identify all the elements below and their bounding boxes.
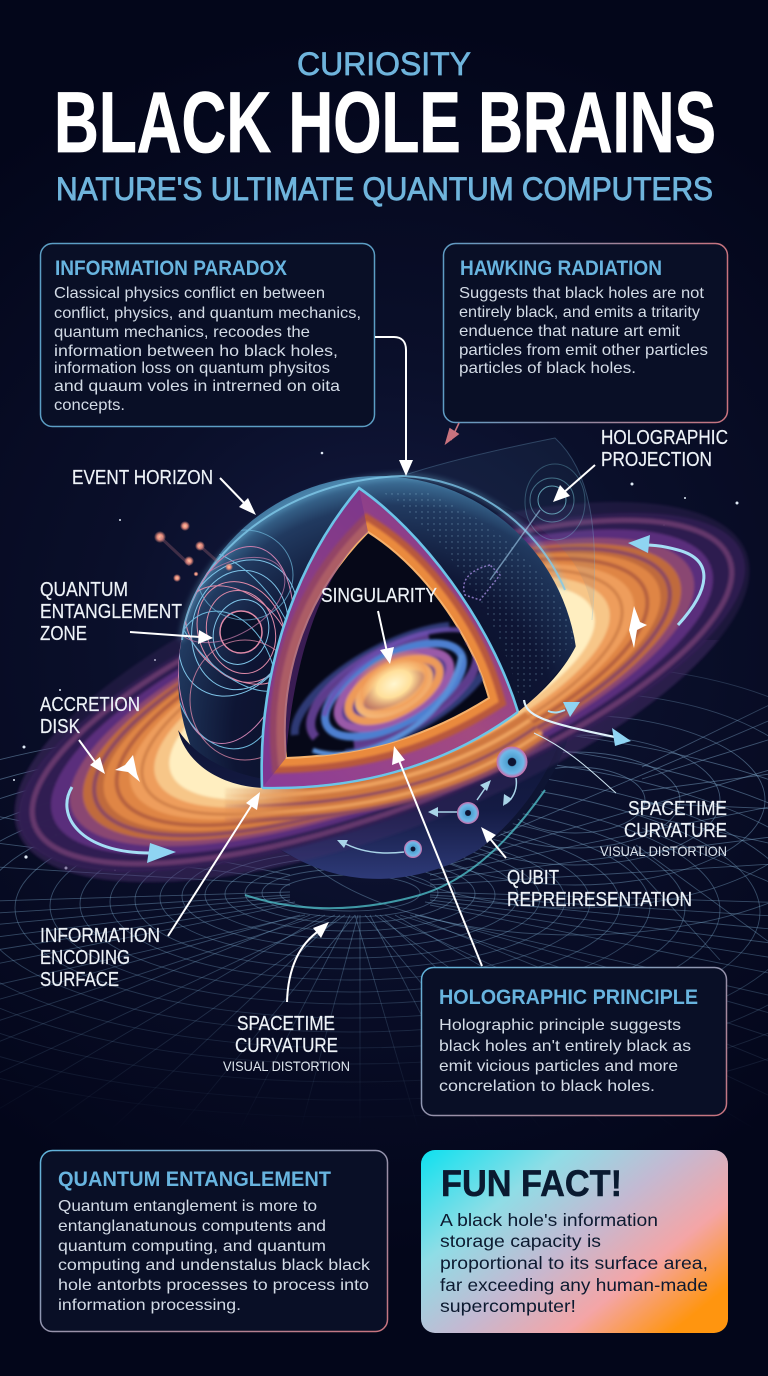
body: hawking radiation: particles of black holes. [459,360,636,377]
singularity galaxy [289,620,484,756]
body: quantum entanglement: hole antorbts processes to process into [58,1277,369,1294]
body: information paradox [54,285,361,414]
heading: information paradox: INFORMATION PARADOX [55,257,287,280]
label: quantum entanglement zone [40,579,182,645]
arrow: singularity [378,611,394,664]
body: quantum entanglement: Quantum entanglement is more to [58,1198,317,1215]
label: spacetime curvature right [600,798,727,859]
label: accretion disk [40,694,140,738]
body: quantum entanglement: quantum computing, and quantum [58,1238,326,1255]
arrow: spacetime curvature [287,922,329,1002]
heading: hawking radiation: HAWKING RADIATION [460,257,662,280]
body: fun fact: supercomputer! [440,1296,576,1316]
spacetime grid [0,665,768,1170]
black hole sphere [178,476,578,879]
body: information paradox: conflict, physics, and quantum mechanics, [54,305,361,322]
body: hawking radiation: entirely black, and emits a tritarity [459,304,700,321]
panel: fun fact [421,1150,728,1333]
body: fun fact [440,1210,708,1316]
body: fun fact: A black hole's information [440,1210,658,1230]
label: quantum entanglement zone: ENTANGLEMENT [40,601,182,623]
body: holographic principle [439,1017,691,1095]
body: hawking radiation [459,285,708,377]
arrow: qubit [481,827,506,858]
panel: quantum entanglement [40,1150,388,1332]
label: accretion disk: ACCRETION [40,694,140,716]
label: spacetime curvature right: VISUAL DISTORTION [600,843,727,859]
label: holographic projection [601,427,728,471]
label: singularity: SINGULARITY [321,585,437,607]
label: spacetime curvature bottom: CURVATURE [235,1035,338,1057]
stars [13,452,738,871]
arrow: information encoding [168,792,260,936]
front orange band [225,720,548,820]
body: fun fact: storage capacity is [440,1231,601,1251]
body: quantum entanglement [58,1198,371,1314]
body: quantum entanglement: computing and undenstalus black black [58,1257,371,1274]
wedge cutaway frame [262,488,518,788]
label: spacetime curvature bottom: SPACETIME [237,1013,335,1035]
body: information paradox: concepts. [54,397,125,414]
label: information encoding surface: SURFACE [40,969,119,991]
body: holographic principle: black holes an't entirely black as [439,1038,691,1055]
label: information encoding surface: INFORMATION [40,925,160,947]
title: curiosity: CURIOSITY [297,46,471,82]
label: spacetime curvature right: CURVATURE [624,820,727,842]
heading: fun fact: FUN FACT! [441,1163,622,1204]
body: information paradox: and quaum voles in intrerned on oita [54,378,340,395]
heading: quantum entanglement: QUANTUM ENTANGLEMENT [58,1168,331,1191]
arrow: holographic projection [553,465,595,502]
label: holographic projection: PROJECTION [601,449,712,471]
label: spacetime curvature right: SPACETIME [628,798,727,820]
label: qubit representation [507,867,692,911]
label: spacetime curvature bottom: VISUAL DISTORTION [223,1058,350,1074]
heading: holographic principle: HOLOGRAPHIC PRINCIPLE [439,986,698,1009]
body: information paradox: Classical physics conflict en between [54,285,325,302]
subtitle: NATURE'S ULTIMATE QUANTUM COMPUTERS [56,171,713,207]
body: holographic principle: emit vicious particles and more [439,1058,678,1075]
qubits [337,746,528,858]
particles [154,521,233,582]
label: quantum entanglement zone: QUANTUM [40,579,128,601]
arrow: quantum entanglement [130,630,213,644]
body: holographic principle: Holographic principle suggests [439,1017,681,1034]
panel: information paradox [40,244,374,426]
body: hawking radiation: enduence that nature art emit [459,323,681,340]
holographic projection [402,438,595,620]
front of accretion disk [14,640,718,882]
body: fun fact: far exceeding any human-made [440,1275,708,1295]
label: holographic projection: HOLOGRAPHIC [601,427,728,449]
label: information encoding surface: ENCODING [40,947,130,969]
label: quantum entanglement zone: ZONE [40,623,87,645]
event horizon rim highlight [262,712,518,788]
label: information encoding surface [40,925,160,991]
body: fun fact: proportional to its surface area, [440,1253,708,1273]
label: accretion disk: DISK [40,716,81,738]
label: qubit representation: REPREIRESENTATION [507,889,692,911]
arrow: information paradox connector [375,337,413,476]
body: quantum entanglement: information processing. [58,1297,241,1314]
panel: hawking radiation [444,244,728,422]
body: hawking radiation: Suggests that black holes are not [459,285,705,302]
body: quantum entanglement: entanglanatunous computents and [58,1218,326,1235]
back of accretion disk [0,423,768,961]
body: information paradox: information loss on quantum physitos [54,360,330,377]
body: hawking radiation: particles from emit other particles [459,342,708,359]
arrow: accretion disk [79,740,105,774]
curve highlight on grid [245,790,545,908]
label: spacetime curvature bottom [223,1013,350,1074]
quantum entanglement rings [178,530,295,760]
arrow: hawking pointer [446,423,459,443]
panel: holographic principle [422,968,726,1116]
label: event horizon: EVENT HORIZON [72,467,213,489]
arrow: event horizon [220,478,256,515]
body: holographic principle: concrelation to black holes. [439,1078,655,1095]
arrow: holographic principle to wedge [392,746,482,966]
disk flow arrows [67,535,704,863]
label: qubit representation: QUBIT [507,867,559,889]
body: information paradox: quantum mechanics, recoodes the [54,324,310,341]
body: information paradox: information between ho black holes, [54,343,338,360]
